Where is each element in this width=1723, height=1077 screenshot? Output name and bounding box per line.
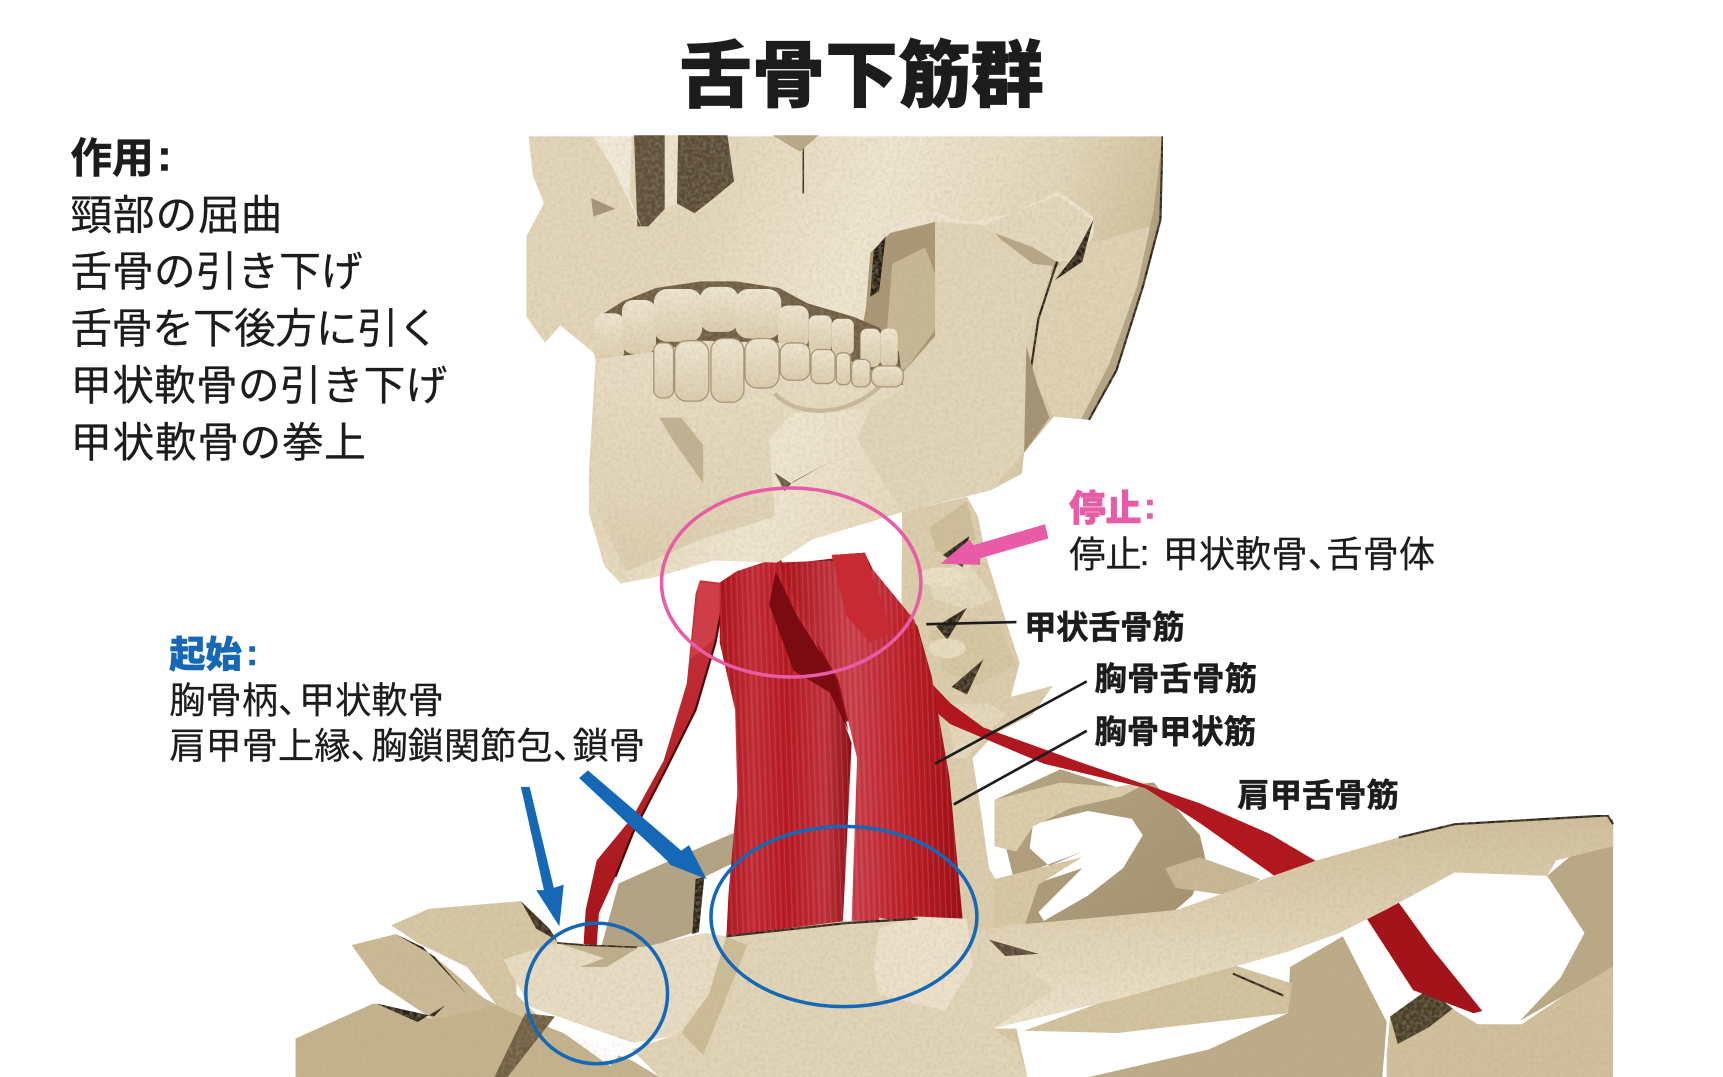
mandible ramus (857, 222, 1053, 512)
label: origin: 胸鎖関節包 (371, 725, 553, 766)
label: sternothyroid: 胸骨甲状筋 (1094, 714, 1256, 750)
muscle: left omohyoid strap (583, 580, 726, 946)
label: origin: 起始 (169, 634, 242, 675)
title: 舌骨下筋群 (679, 36, 1044, 117)
label: origin: 肩甲骨上縁 (169, 725, 350, 766)
label: origin: : (246, 632, 258, 673)
mandibular notch (857, 222, 935, 387)
leader line: sternohyoid (935, 681, 1087, 764)
lower teeth (654, 339, 903, 402)
skull silhouette (526, 136, 1163, 584)
label: omohyoid: 肩甲舌骨筋 (1237, 778, 1399, 814)
muscle: sternohyoid left (720, 558, 852, 936)
text block: actions (70, 131, 447, 466)
arrow: origin right (579, 770, 707, 879)
label: sternohyoid: 胸骨舌骨筋 (1094, 661, 1257, 697)
label: origin: 鎖骨 (573, 725, 645, 766)
skeleton: cervical spine (901, 497, 1053, 956)
label: insertion: 甲状軟骨 (1163, 534, 1308, 575)
nasal cavity (634, 135, 665, 226)
text block: actions: 頸部の屈曲 (70, 192, 282, 239)
muscle: right omohyoid (832, 553, 1482, 1013)
label: origin: 、 (351, 725, 387, 766)
mouth shadow behind teeth (599, 281, 903, 387)
muscle: sternothyroid right (769, 553, 963, 923)
label: origin: 、 (553, 725, 589, 766)
skull (526, 135, 1163, 584)
label: origin: 、 (278, 680, 314, 721)
label: insertion: 、 (1308, 534, 1344, 575)
temporal bone (1037, 225, 1154, 420)
arrow: insertion (941, 524, 1048, 565)
label: origin: 胸骨柄 (169, 680, 278, 721)
lower jaw ridge (596, 341, 907, 571)
label: insertion: 舌骨体 (1326, 534, 1435, 575)
label: origin (169, 632, 645, 766)
vertebra facets (919, 501, 1016, 758)
skeleton: left back rib (601, 832, 738, 947)
label: insertion: 停止 (1069, 534, 1142, 575)
callout: insertion ellipse (662, 488, 921, 677)
label: origin: 甲状軟骨 (299, 680, 444, 721)
callout: origin ellipse large (711, 826, 977, 1007)
label: thyrohyoid: 甲状舌骨筋 (1024, 609, 1185, 645)
text block: actions: : (157, 131, 172, 180)
skeleton: right scapula and ribs (989, 819, 1613, 1077)
skeleton: first rib ring (994, 769, 1260, 958)
label: insertion: 停止 (1069, 488, 1142, 529)
jaw facets (659, 418, 703, 484)
arrow: origin left (521, 787, 564, 926)
zygomatic arch (870, 191, 1093, 260)
skeleton: sternum and left clavicle (503, 917, 1055, 1077)
text block: actions: 甲状軟骨の引き下げ (70, 362, 447, 409)
callout: origin ellipse small (526, 923, 668, 1064)
label: insertion (1069, 486, 1435, 575)
muscle: deep layer (769, 558, 932, 725)
label: insertion: : (1140, 532, 1150, 573)
label: insertion: : (1144, 486, 1156, 527)
leader line: thyrohyoid (926, 622, 1016, 624)
skeleton: right clavicle (868, 815, 1613, 1029)
skeleton: left shoulder bones (296, 901, 659, 1077)
leader line: sternothyroid (954, 731, 1087, 804)
text block: actions: 舌骨を下後方に引く (70, 305, 440, 352)
text block: actions: 舌骨の引き下げ (70, 248, 363, 295)
text block: actions: 甲状軟骨の拳上 (70, 419, 366, 466)
text block: actions: 作用 (70, 135, 154, 182)
upper teeth (594, 287, 898, 367)
